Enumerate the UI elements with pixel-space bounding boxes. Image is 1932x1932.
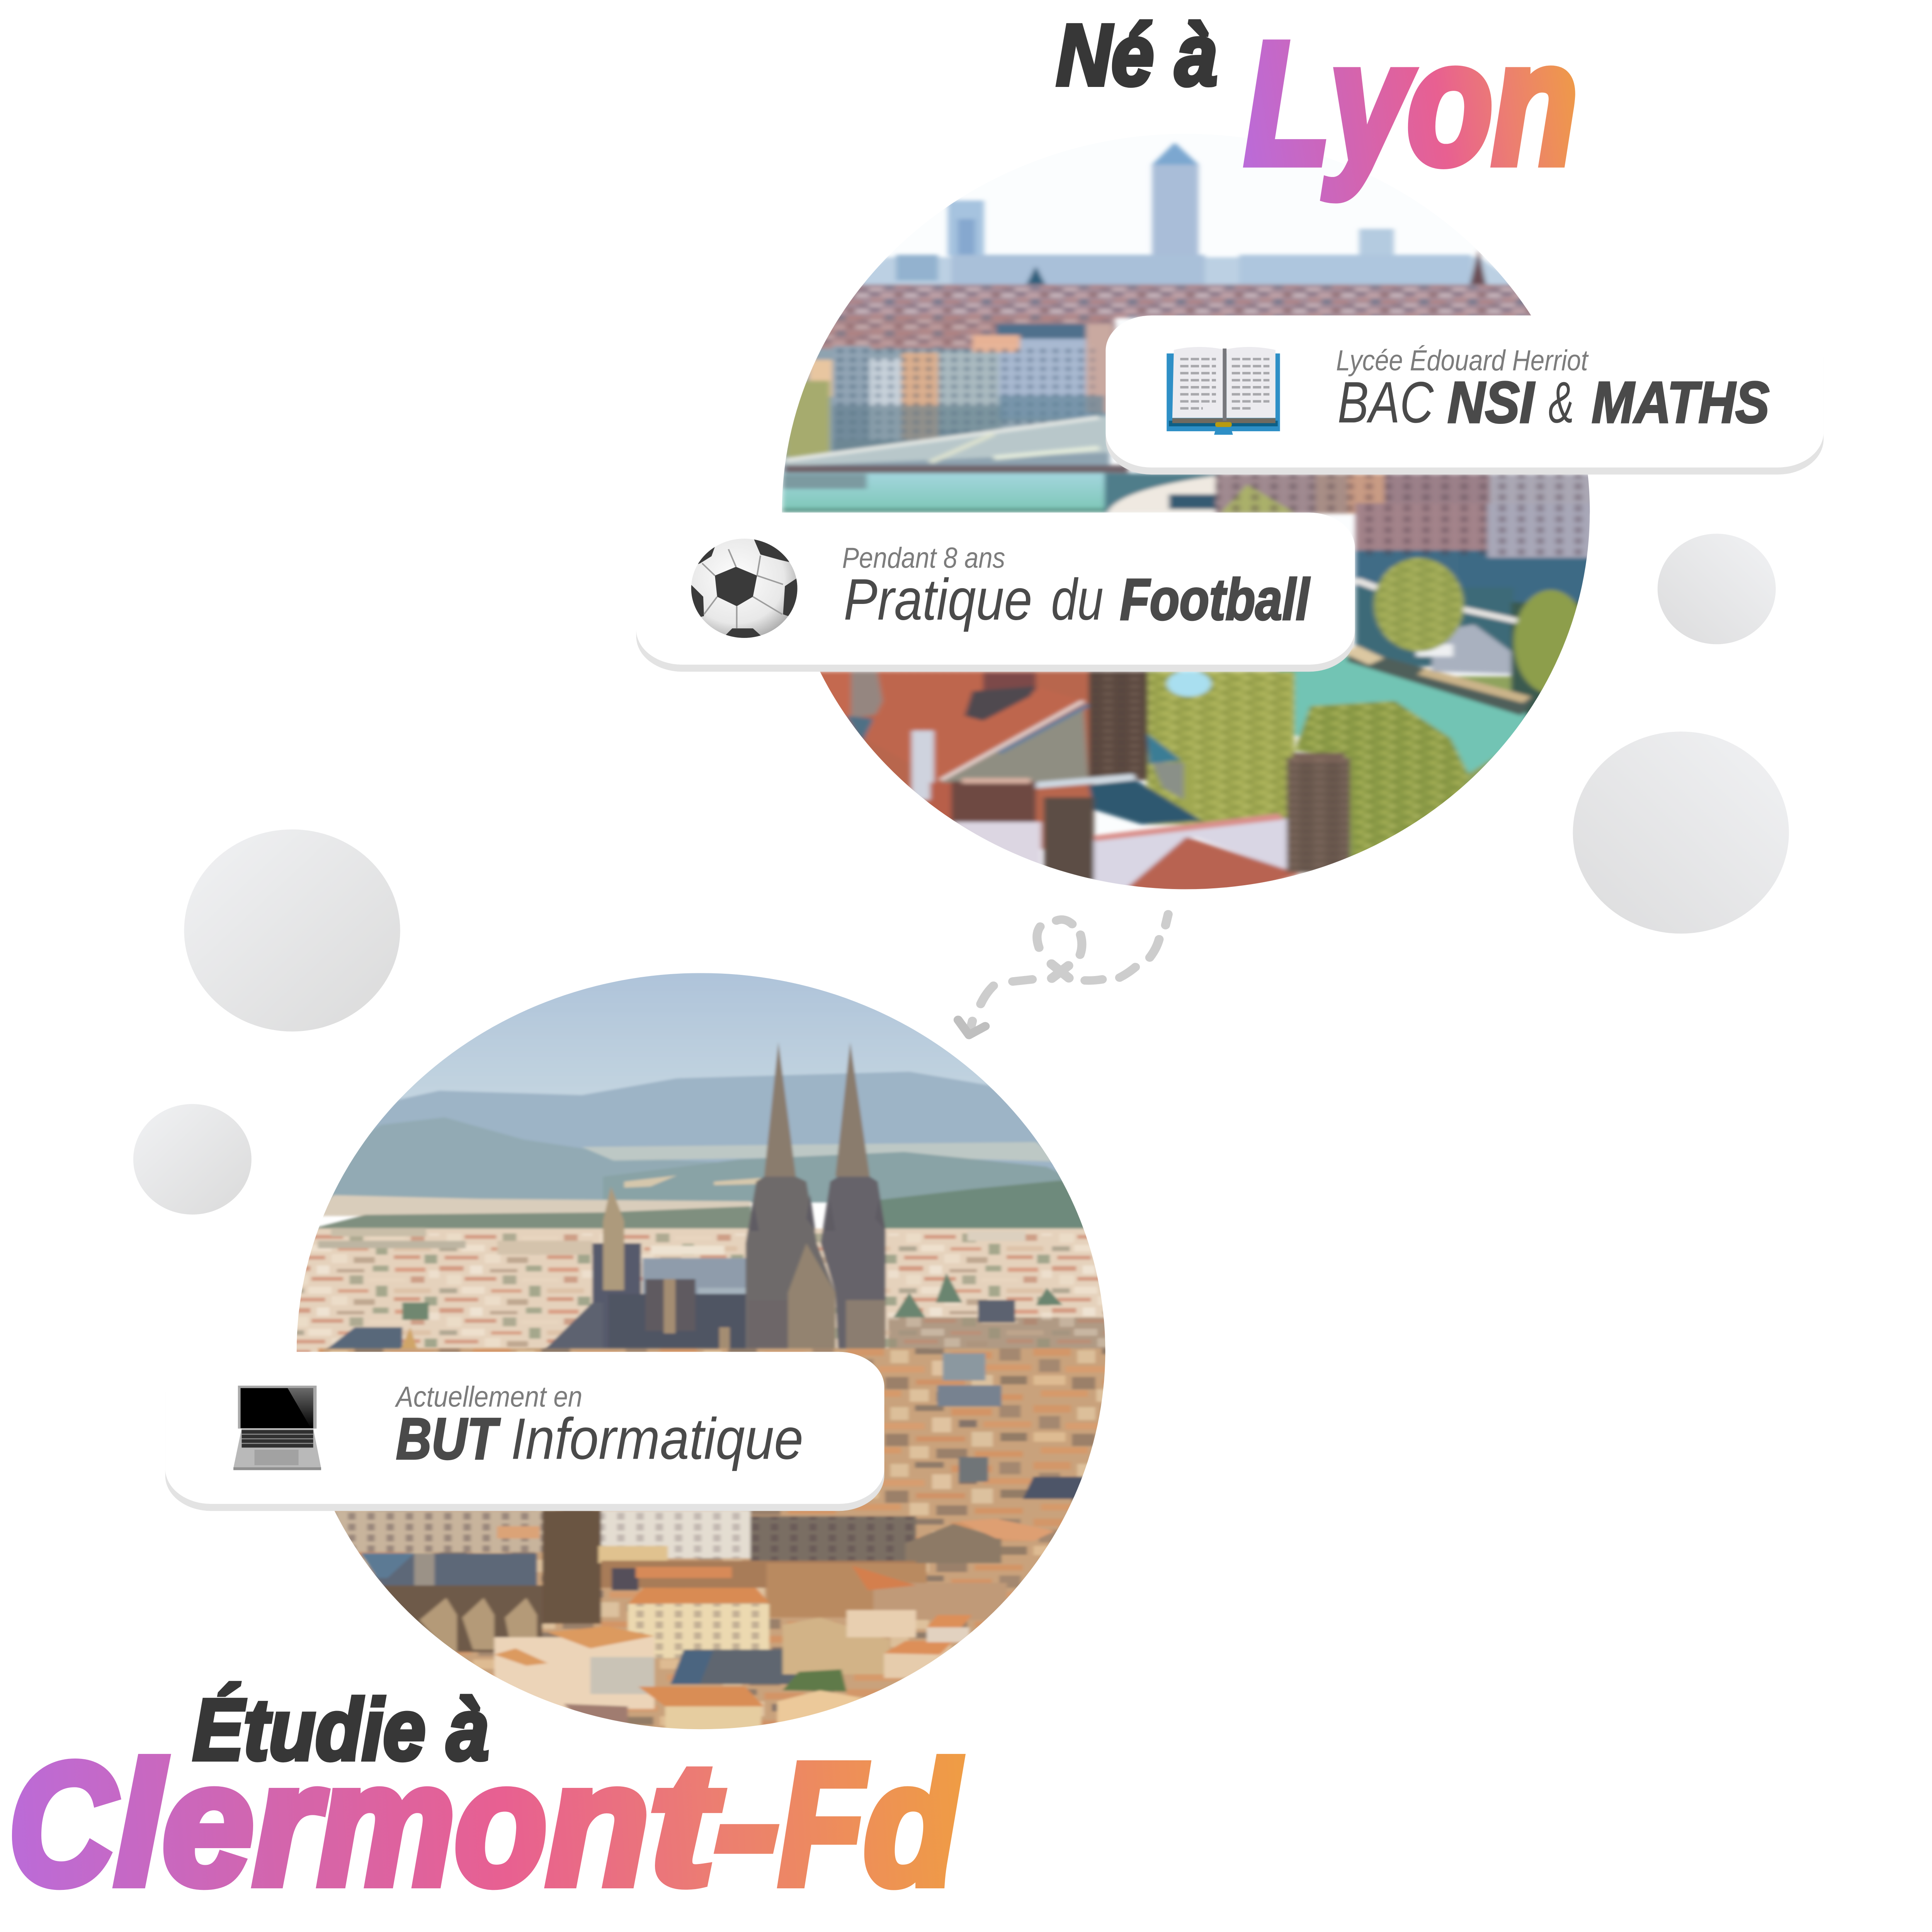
title: BAC NSI & MATHS: & bbox=[1548, 370, 1574, 435]
heading: Né à: Né à bbox=[1056, 7, 1218, 104]
heading: Clermont-Fd: n bbox=[547, 1728, 649, 1921]
heading: Clermont-Fd: - bbox=[714, 1728, 779, 1921]
card: BAC NSI & MATHS bbox=[1105, 315, 1823, 474]
card shape with bottom shadow bbox=[636, 513, 1355, 672]
photo: Lyon skyline in a circle bbox=[782, 134, 1601, 898]
title: Pratique du Football: Football bbox=[1120, 567, 1310, 632]
heading: Clermont-Fd: t bbox=[649, 1728, 723, 1921]
label: Lycée Édouard Herriot: Lycée Édouard Herriot bbox=[1336, 344, 1589, 377]
title: BUT Informatique bbox=[396, 1406, 803, 1471]
heading: Clermont-Fd: m bbox=[318, 1728, 455, 1921]
dashed arrow from Lyon to Clermont-Fd bbox=[958, 914, 1168, 1035]
title: Pratique du Football: Pratique bbox=[844, 567, 1032, 632]
title: BAC NSI & MATHS: NSI bbox=[1447, 370, 1535, 435]
title: BAC NSI & MATHS bbox=[1338, 370, 1769, 435]
label: Actuellement en: Actuellement en bbox=[395, 1380, 582, 1413]
card: BUT Informatique bbox=[165, 1352, 884, 1511]
photo: Clermont-Ferrand cathedral in a circle bbox=[265, 972, 1131, 1733]
title: Pratique du Football bbox=[844, 567, 1310, 632]
heading: Clermont-Fd: F bbox=[779, 1728, 868, 1921]
heading: Clermont-Fd: l bbox=[115, 1728, 166, 1921]
card shape with bottom shadow bbox=[165, 1352, 884, 1511]
card: Pratique du Football bbox=[636, 513, 1355, 672]
heading: Clermont-Fd: o bbox=[455, 1728, 547, 1921]
title: BUT Informatique: Informatique bbox=[511, 1406, 803, 1471]
decorative circle: large left bbox=[184, 830, 400, 1031]
heading: Clermont-Fd: e bbox=[163, 1728, 253, 1921]
decorative circle: small left bbox=[133, 1104, 252, 1214]
title: BUT Informatique: BUT bbox=[396, 1406, 500, 1471]
heading: Étudie à: Étudie à bbox=[193, 1682, 489, 1778]
icon: laptop bbox=[233, 1386, 321, 1470]
label: Pendant 8 ans: Pendant 8 ans bbox=[842, 541, 1005, 574]
heading: Clermont-Fd: d bbox=[864, 1728, 963, 1921]
decorative circle: large right bbox=[1573, 731, 1789, 934]
heading: Clermont-Fd: C bbox=[9, 1728, 117, 1921]
heading: Lyon: Lyon bbox=[1245, 7, 1577, 201]
title: BAC NSI & MATHS: MATHS bbox=[1592, 370, 1769, 435]
icon: open book bbox=[1167, 347, 1280, 435]
decorative circle: small right bbox=[1658, 534, 1776, 644]
icon: soccer ball bbox=[691, 535, 798, 643]
title: Pratique du Football: du bbox=[1051, 567, 1104, 632]
heading: Clermont-Fd: r bbox=[253, 1728, 326, 1921]
title: BAC NSI & MATHS: BAC bbox=[1338, 370, 1434, 435]
card shape with bottom shadow bbox=[1105, 315, 1823, 474]
